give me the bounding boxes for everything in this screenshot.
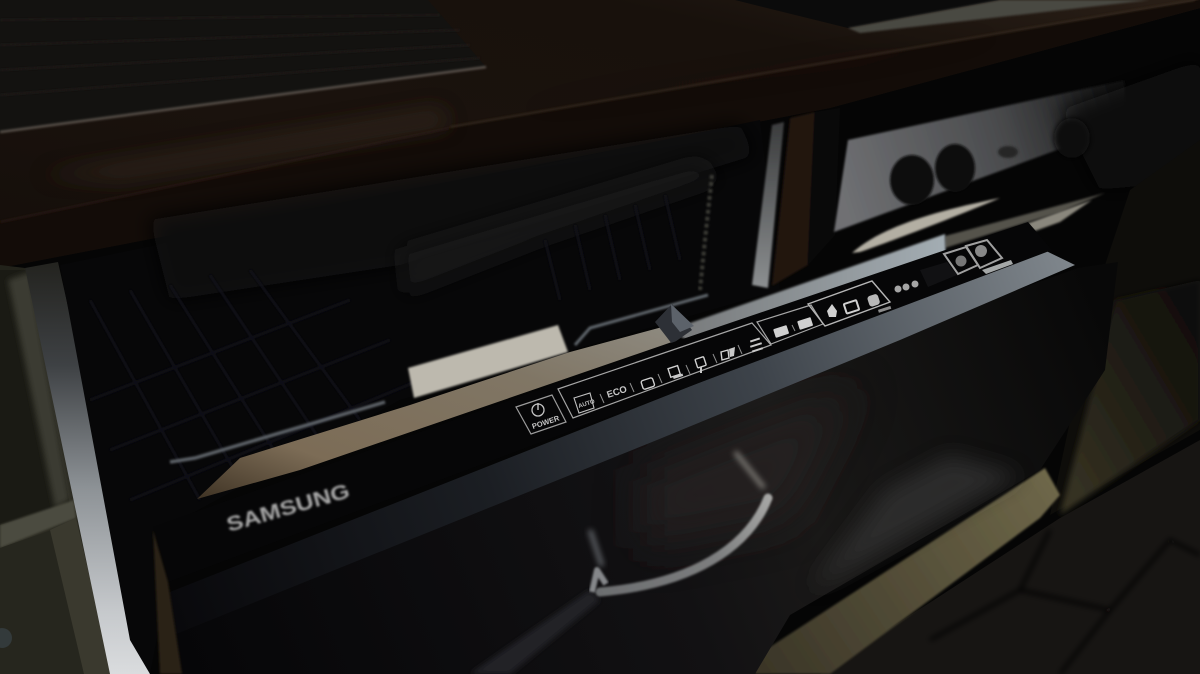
door left side edge bbox=[153, 530, 182, 674]
door handle bbox=[590, 452, 768, 592]
power button: POWER bbox=[531, 413, 561, 431]
auto icon: AUTO bbox=[578, 399, 596, 410]
auto icon bbox=[574, 393, 596, 413]
programme button group bbox=[558, 323, 771, 418]
start button bbox=[966, 240, 1013, 274]
dishwasher interior with racks bbox=[60, 120, 780, 674]
plinth bbox=[750, 468, 1060, 674]
right cabinet bbox=[1050, 140, 1200, 515]
upper rack wire bbox=[575, 295, 708, 345]
black control strip bbox=[153, 222, 1052, 582]
door inner grey bar bbox=[655, 234, 946, 344]
white cabinet post bbox=[25, 262, 150, 674]
programme icons bbox=[641, 338, 763, 390]
knob left bbox=[890, 155, 934, 205]
knob far right bbox=[1054, 118, 1090, 158]
extra option button group bbox=[808, 281, 891, 326]
door grey trim strip bbox=[170, 248, 1075, 634]
digital display bbox=[920, 262, 957, 287]
floor bbox=[820, 440, 1200, 674]
cycle option button group bbox=[757, 305, 823, 344]
lower rack wire bbox=[170, 402, 385, 462]
left cabinet bbox=[0, 265, 125, 674]
tub side post bbox=[752, 108, 840, 288]
separators bbox=[600, 345, 742, 403]
sink drainer on countertop bbox=[0, 0, 486, 132]
hob at top right bbox=[735, 0, 1150, 33]
power button bbox=[516, 395, 566, 434]
door top beige edge bbox=[197, 326, 672, 499]
eco label: ECO bbox=[606, 384, 629, 401]
oven lower trim highlights bbox=[852, 193, 1105, 253]
delay button bbox=[944, 247, 978, 274]
white detergent holder bbox=[408, 325, 568, 398]
countertop bbox=[0, 0, 1200, 268]
status dots bbox=[894, 280, 918, 292]
door front bbox=[165, 262, 1118, 674]
oven control panel bbox=[834, 60, 1200, 232]
knob right bbox=[935, 144, 975, 192]
oven logo bbox=[998, 146, 1018, 158]
Samsung logo: SAMSUNG bbox=[224, 480, 352, 537]
